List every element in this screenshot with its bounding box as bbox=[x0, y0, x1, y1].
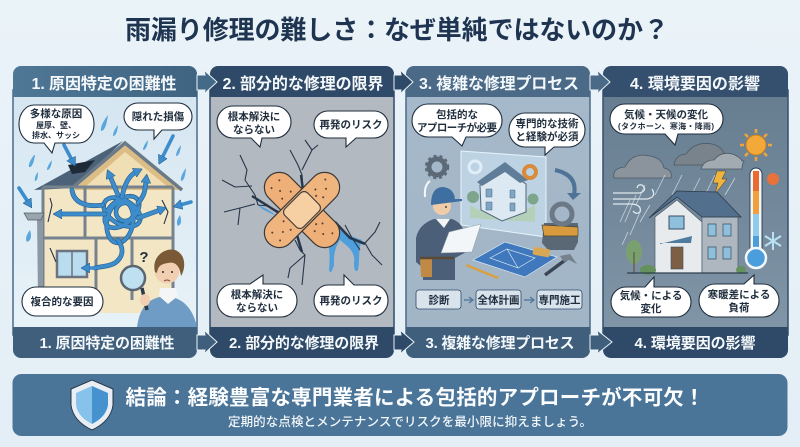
panel 2 header: 2. 部分的な修理の限界 bbox=[222, 75, 384, 93]
icon: floor blueprint and tools bbox=[466, 242, 577, 278]
icon: toolbox bbox=[542, 204, 578, 250]
callout: change due to climate bbox=[611, 277, 691, 317]
step: specialist work: 専門施工 bbox=[538, 294, 581, 306]
callout: not a root fix (bottom) bbox=[217, 275, 297, 317]
panel 1 footer: 1. 原因特定の困難性 bbox=[40, 334, 174, 352]
panel 3 header: 3. 複雑な修理プロセス bbox=[419, 74, 579, 93]
callout: multiple causes bbox=[19, 105, 94, 153]
arrow: panel 3 to 4 (bottom) bbox=[590, 330, 612, 354]
callout: temperature difference load bbox=[699, 275, 779, 317]
callout: compound causes bbox=[22, 287, 103, 316]
arrow: panel 1 to 2 (bottom) bbox=[197, 330, 217, 354]
panel 3 footer bbox=[406, 327, 590, 358]
conclusion banner bbox=[12, 374, 788, 436]
panel 3 header bbox=[406, 66, 590, 97]
icon: holographic house plan bbox=[461, 151, 546, 237]
callout: comprehensive approach required: アプローチが必要 bbox=[417, 121, 498, 134]
callout: temperature difference load: 負荷 bbox=[728, 301, 750, 314]
arrow: panel 3 to 4 (top) bbox=[590, 70, 610, 94]
callout: climate and weather changes: 気候・天候の変化 bbox=[624, 108, 708, 121]
icon: gear and arrows bbox=[425, 156, 581, 200]
callout: climate and weather changes bbox=[610, 104, 723, 145]
icon: shield bbox=[71, 380, 113, 430]
callout: recurrence risk (bottom) bbox=[314, 275, 388, 316]
callout: not a root fix (top): 根本解決に bbox=[228, 110, 280, 123]
step: overall plan: 全体計画 bbox=[478, 294, 520, 306]
step: overall plan bbox=[476, 290, 521, 309]
icon: sun bbox=[740, 129, 772, 161]
callout: recurrence risk (top): 再発のリスク bbox=[320, 118, 382, 131]
panel 1 header bbox=[13, 66, 197, 97]
callout: change due to climate: 変化 bbox=[640, 302, 662, 315]
callout: multiple causes: 屋厚、壁、 bbox=[36, 120, 76, 130]
icon: rain drops bbox=[26, 115, 186, 242]
callout: temperature difference load: 寒暖差による bbox=[708, 288, 770, 301]
icon: worker with plan bbox=[416, 187, 481, 280]
icon: worried man with magnifier bbox=[121, 249, 197, 327]
panel 1 footer bbox=[13, 327, 197, 358]
title: 雨漏り修理の難しさ：なぜ単純ではないのか？ bbox=[125, 15, 669, 45]
panel: 4. environmental factors bbox=[603, 66, 788, 358]
callout: not a root fix (bottom): ならない bbox=[236, 302, 278, 314]
callout: expertise required bbox=[509, 113, 585, 155]
conclusion heading: 結論：経験豊富な専門業者による包括的アプローチが不可欠！ bbox=[126, 386, 704, 410]
conclusion subtext: 定期的な点検とメンテナンスでリスクを最小限に抑えましょう。 bbox=[228, 414, 592, 429]
panel 1 header: 1. 原因特定の困難性 bbox=[32, 74, 176, 93]
icon: wall cracks bbox=[222, 140, 382, 285]
panel 2 footer: 2. 部分的な修理の限界 bbox=[229, 334, 379, 352]
arrow: panel 1 to 2 (top) bbox=[197, 70, 217, 94]
callout: recurrence risk (top) bbox=[314, 111, 388, 147]
panel 4 footer bbox=[603, 327, 788, 358]
panel 4 footer: 4. 環境要因の影響 bbox=[634, 334, 756, 352]
callout: not a root fix (top): ならない bbox=[233, 124, 275, 136]
panel 3 footer: 3. 複雑な修理プロセス bbox=[426, 334, 574, 352]
callout: hidden damage bbox=[124, 103, 192, 139]
icon: house cutaway bbox=[24, 141, 182, 313]
icon: house in storm bbox=[626, 191, 748, 275]
panel 4 header bbox=[603, 66, 788, 97]
panel: 1. cause identification bbox=[13, 66, 197, 358]
panel 4 header: 4. 環境要因の影響 bbox=[630, 74, 760, 93]
callout: expertise required: 専門的な技術 bbox=[516, 117, 579, 130]
callout: multiple causes: 多様な原因 bbox=[30, 107, 82, 120]
icon: worried man with magnifier: ? bbox=[139, 249, 149, 266]
callout: compound causes: 複合的な要因 bbox=[30, 295, 94, 308]
callout: comprehensive approach required: 包括的な bbox=[436, 108, 478, 121]
callout: climate and weather changes: (タクホーン、寒海・降雨) bbox=[618, 121, 714, 131]
icon: tangled water paths bbox=[19, 136, 191, 268]
icon: rain, wind and lightning bbox=[613, 171, 735, 245]
callout: comprehensive approach required bbox=[412, 104, 502, 146]
callout: recurrence risk (bottom): 再発のリスク bbox=[320, 294, 382, 307]
callout: not a root fix (bottom): 根本解決に bbox=[231, 288, 283, 301]
icon: crossed bandages bbox=[258, 166, 346, 254]
callout: hidden damage: 隠れた損傷 bbox=[132, 110, 185, 123]
callout: multiple causes: 排水、サッシ bbox=[32, 130, 80, 140]
process steps bbox=[416, 290, 582, 309]
step: diagnosis bbox=[416, 290, 461, 309]
arrow: step 2 to 3 bbox=[524, 297, 534, 303]
callout: not a root fix (top) bbox=[217, 106, 291, 147]
arrow: panel 2 to 3 (bottom) bbox=[394, 330, 414, 354]
icon: thermometer bbox=[746, 168, 781, 268]
icon: clouds bbox=[614, 143, 744, 178]
arrow: step 1 to 2 bbox=[464, 297, 473, 303]
step: diagnosis: 診断 bbox=[428, 294, 450, 306]
callout: change due to climate: 気候・による bbox=[620, 289, 682, 302]
panel 2 header bbox=[210, 66, 394, 97]
callout: expertise required: と経験が必須 bbox=[516, 130, 579, 143]
step: specialist work bbox=[537, 290, 582, 309]
panel 2 footer bbox=[210, 327, 394, 358]
panel: 2. limits of partial repair bbox=[210, 66, 394, 358]
arrow: panel 2 to 3 (top) bbox=[394, 70, 413, 94]
panel: 3. complex repair process bbox=[406, 66, 590, 358]
